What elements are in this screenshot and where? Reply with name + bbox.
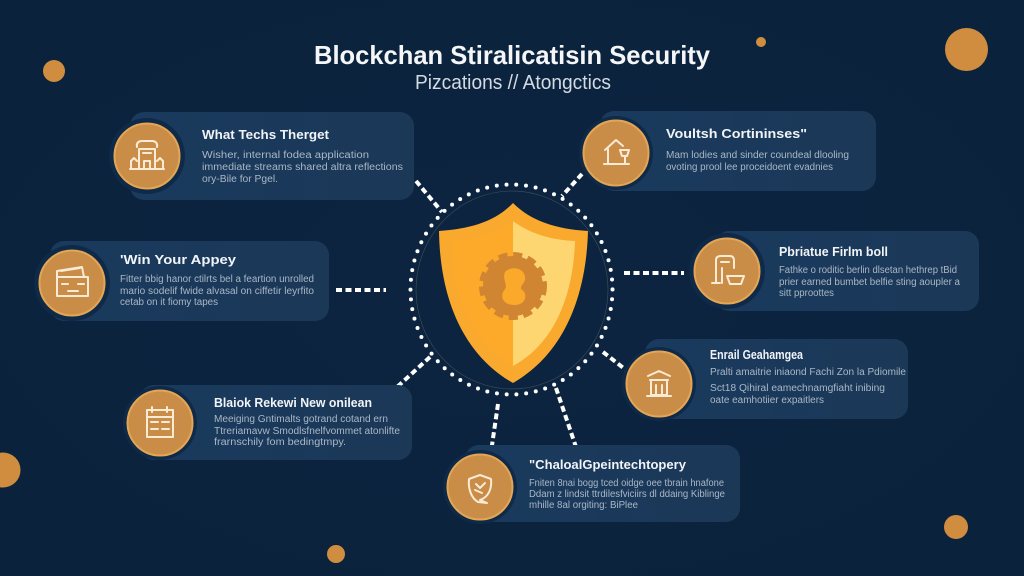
gear emblem <box>482 255 544 317</box>
panel text <box>529 457 725 511</box>
panel text <box>779 244 960 299</box>
panel text: Meeiging Gntimalts gotrand cotand ern <box>214 414 388 425</box>
panel text: Pbriatue Firlm boll <box>779 244 888 259</box>
panel text: mario sodelif fwide alvasal on ciffetir leyrfito <box>120 286 314 297</box>
dotted ring around shield <box>410 184 612 394</box>
panel text: Enrail Geahamgea <box>710 347 804 362</box>
panel: blaiok rekewi new onilean <box>123 385 412 460</box>
panel text: ovoting prool lee proceidoent evadnies <box>666 162 833 173</box>
panel text: Wisher, internal fodea application <box>202 150 369 161</box>
panel text: frarnschily fom bedingtmpy. <box>214 437 346 448</box>
panel: chaloal gpeintechtopery <box>443 445 740 524</box>
panel text: "ChaloalGpeintechtopery <box>529 457 687 472</box>
panel text: Sct18 Qihiral eamechnamgfiaht inibing <box>710 383 885 394</box>
icon: building <box>130 141 164 169</box>
panel: enrail geahamgea <box>622 339 908 421</box>
panel text: cetab on it fiomy tapes <box>120 297 218 308</box>
panel text: 'Win Your Appey <box>120 252 237 267</box>
icon: shield with network <box>469 475 491 503</box>
panel text: Fitter bbig hanor ctilrts bel a feartion unrolled <box>120 274 314 285</box>
panel text <box>666 126 849 173</box>
panel text: oate eamhotiier expaitlers <box>710 395 824 406</box>
title: Blockchan Stiralicatisin Security <box>314 40 711 70</box>
icon: bank <box>647 371 671 396</box>
panel text <box>120 252 314 308</box>
central shield <box>439 203 588 383</box>
panel text: prier earned bumbet belfie sting aoupler a <box>779 277 960 288</box>
panel text: Mam lodies and sinder coundeal dlooling <box>666 150 849 161</box>
faint ring behind shield <box>416 191 608 389</box>
panel text: sitt pproottes <box>779 288 834 299</box>
panel text: Fathke o roditic berlin dlsetan hethrep tBid <box>779 265 957 276</box>
panel: what techs therget <box>109 112 414 200</box>
icon: document and bowl <box>712 256 744 284</box>
panel text: Blaiok Rekewi New onilean <box>214 395 372 410</box>
icon: wallet <box>57 267 88 296</box>
panel text: Pralti amaitrie iniaond Fachi Zon la Pdiomile <box>710 367 906 378</box>
dashed connectors <box>336 174 684 452</box>
panel text: Fniten 8nai bogg tced oidge oee tbrain hnafone <box>529 478 724 489</box>
panel text: immediate streams shared altra reflections <box>202 162 403 173</box>
panel: voutlsh cortininses <box>579 111 876 191</box>
panel: pbriatue firlm boll <box>689 231 979 311</box>
panel text <box>214 395 400 448</box>
panel text <box>710 347 906 406</box>
panel text: Ttreriamavw Smodlsfnelfvommet atonlifte <box>214 426 400 437</box>
subtitle: Pizcations // Atongctics <box>415 72 611 94</box>
panel text: ory-Bile for Pgel. <box>202 174 278 185</box>
panel text <box>202 127 403 185</box>
panel text: Ddam z lindsit ttrdilesfviciirs dl ddaing Kiblinge <box>529 489 725 500</box>
icon: house <box>604 140 629 164</box>
panel text: Voultsh Cortininses" <box>666 126 807 141</box>
panel text: mhille 8al orgiting: BiPlee <box>529 500 638 511</box>
icon: calendar <box>147 407 173 437</box>
panel: win your appey <box>34 241 329 321</box>
panel text: What Techs Therget <box>202 127 330 142</box>
